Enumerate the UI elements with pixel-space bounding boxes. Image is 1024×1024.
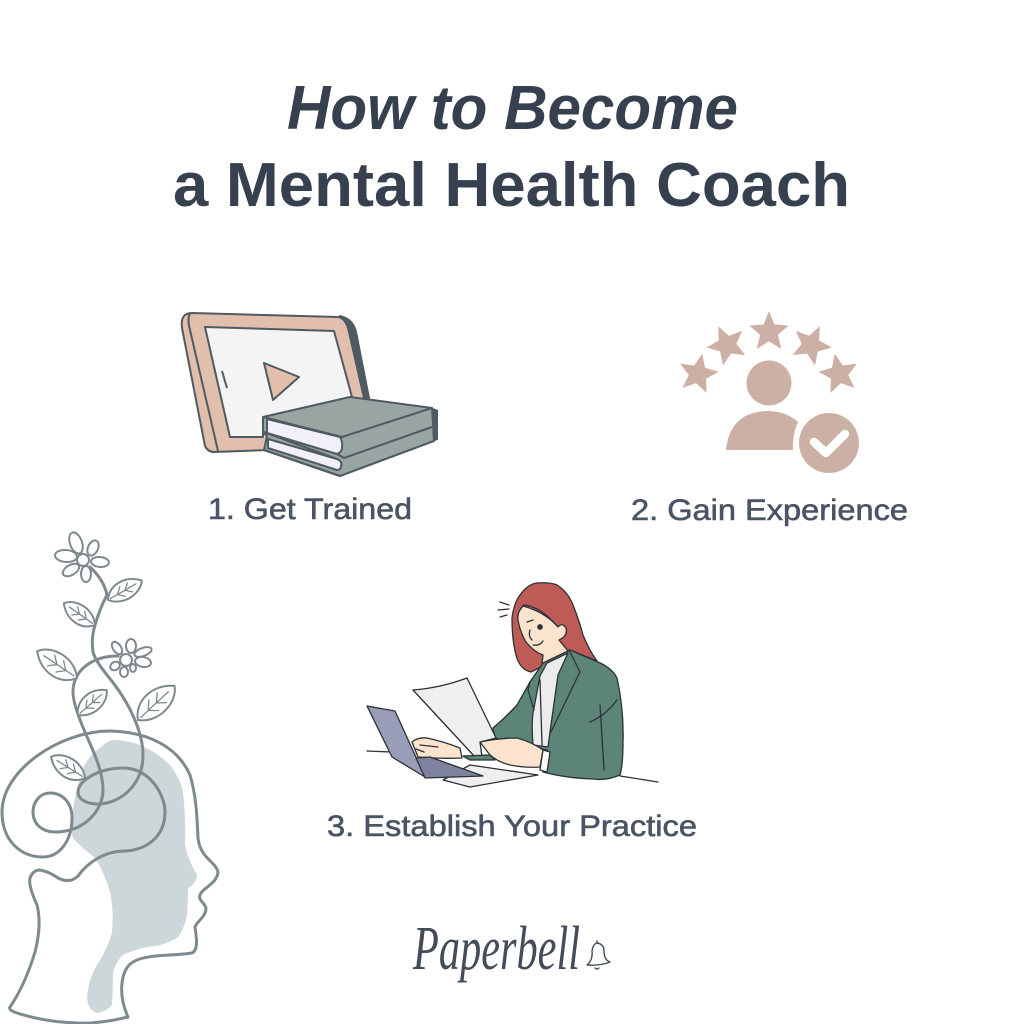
books — [263, 397, 438, 476]
label: step 1: 1. Get Trained — [208, 493, 412, 526]
illustration: woman at laptop — [367, 583, 658, 787]
title — [173, 74, 850, 220]
jacket — [493, 650, 623, 780]
illustration: head with growing vine — [2, 531, 218, 1023]
left arm — [412, 738, 462, 758]
face — [518, 606, 568, 668]
hair back — [512, 583, 597, 672]
title: a Mental Health Coach — [173, 151, 850, 220]
title: How to Become — [287, 74, 738, 143]
icon: bell — [587, 941, 610, 969]
label: step 2: 2. Gain Experience — [631, 494, 908, 527]
icon: person with stars and check — [676, 312, 861, 473]
logo: Paperbell: Paperbell — [412, 915, 580, 983]
laptop — [367, 706, 425, 777]
label: step 3: 3. Establish Your Practice — [327, 810, 697, 843]
tablet — [182, 313, 369, 452]
icon: tablet with books — [182, 313, 438, 476]
desk papers — [443, 765, 538, 787]
flower: middle — [109, 639, 153, 677]
face details — [523, 605, 557, 645]
paper — [413, 678, 496, 757]
flower: top — [55, 531, 109, 582]
right hand — [480, 738, 543, 767]
leaves — [31, 572, 182, 786]
shirt — [532, 653, 568, 747]
head shade — [71, 740, 197, 1013]
head outline and vines — [2, 567, 218, 1023]
